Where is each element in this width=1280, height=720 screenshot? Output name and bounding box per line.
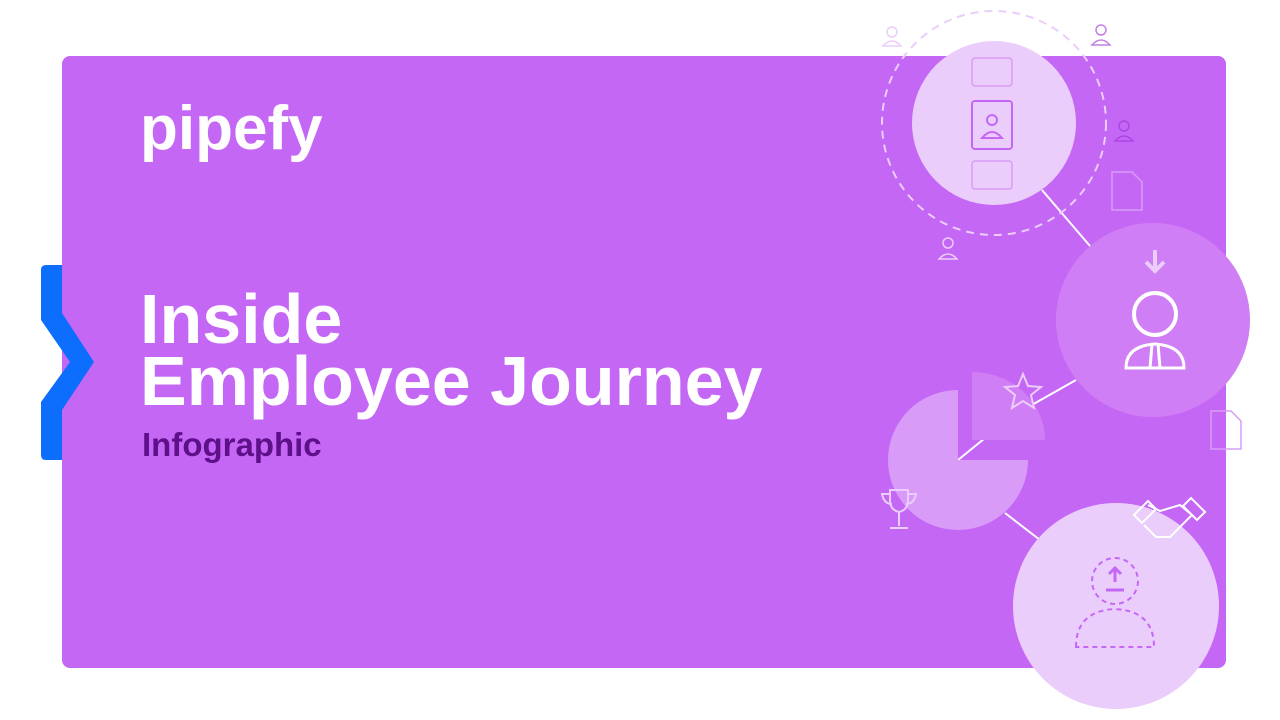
connector lines (958, 190, 1090, 540)
logo: pipefy: pipefy (140, 94, 323, 163)
title (140, 280, 762, 420)
title: Employee Journey (140, 342, 762, 420)
icon: handshake (1134, 498, 1205, 537)
panel: main purple card (62, 56, 1226, 668)
dashed ring (882, 11, 1106, 235)
pie chart (888, 372, 1045, 530)
icons: small people and documents (883, 27, 957, 259)
icon: blue chevron (41, 265, 94, 460)
circle: new employee (1056, 223, 1250, 417)
title: Inside (140, 280, 342, 358)
circle: offboarding (1013, 503, 1219, 709)
subtitle: Infographic (142, 426, 322, 463)
icon: trophy (882, 490, 916, 528)
circle: id badges (912, 41, 1076, 205)
